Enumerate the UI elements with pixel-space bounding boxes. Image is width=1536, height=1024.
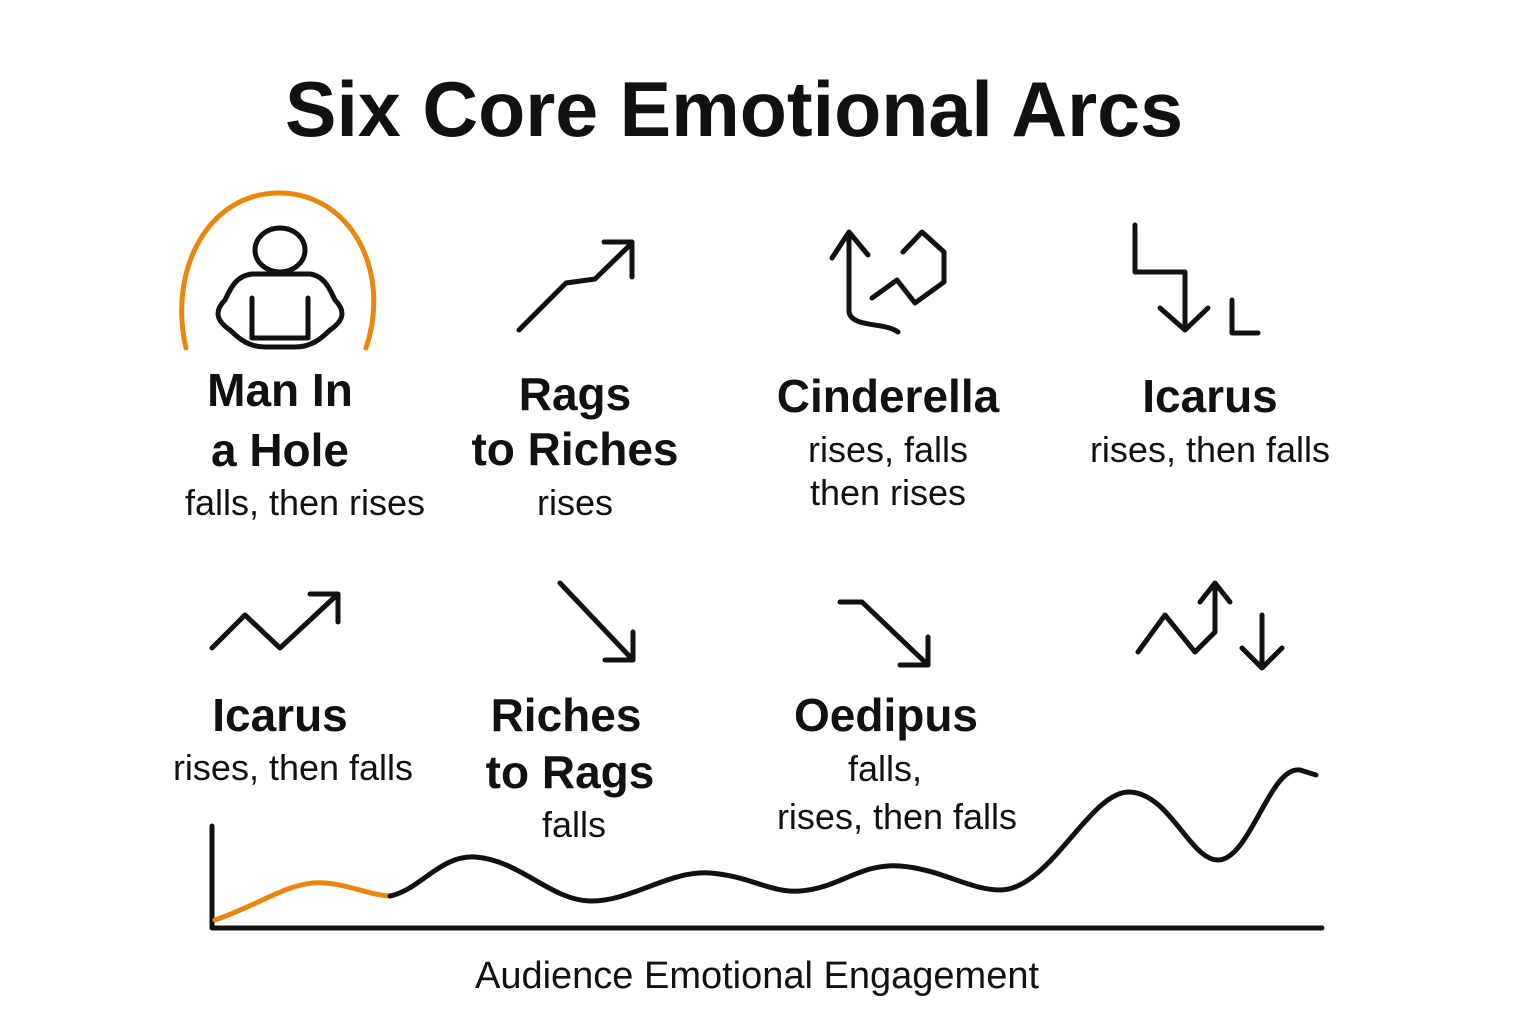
title: Six Core Emotional Arcs (285, 65, 1183, 153)
icon: rags to riches (519, 242, 632, 330)
icon: cinderella (832, 232, 944, 332)
label: riches to rags: falls (542, 804, 606, 845)
label: icarus 2: rises, then falls (173, 747, 413, 788)
label: icarus: rises, then falls (1090, 429, 1330, 470)
label: icarus: Icarus (1142, 370, 1278, 422)
label: icarus 2: Icarus (212, 689, 348, 741)
icon: oedipus arrows (1138, 583, 1282, 668)
icon: riches to rags (560, 583, 633, 660)
label: cinderella: then rises (810, 472, 966, 513)
label: oedipus (777, 689, 1017, 837)
label: riches to rags (486, 689, 654, 845)
chart: engagement curve (212, 770, 1322, 928)
label: oedipus: falls, (848, 748, 922, 789)
icon: icarus (1135, 225, 1258, 333)
label: cinderella: Cinderella (777, 370, 1000, 422)
label: man in a hole (185, 364, 425, 523)
icon: oedipus (840, 602, 928, 665)
label: riches to rags: to Rags (486, 746, 654, 798)
icon: man in a hole (182, 193, 374, 348)
label: rags to riches: Rags (519, 368, 631, 420)
label: man in a hole: Man In (207, 364, 353, 416)
label: cinderella (777, 370, 1000, 513)
label: man in a hole: a Hole (211, 424, 349, 476)
label: rags to riches (471, 368, 679, 523)
label: man in a hole: falls, then rises (185, 482, 425, 523)
label: cinderella: rises, falls (808, 429, 968, 470)
label: oedipus: Oedipus (794, 689, 978, 741)
axis label: Audience Emotional Engagement (475, 955, 1039, 997)
label: rags to riches: rises (537, 482, 613, 523)
label: icarus (1090, 370, 1330, 470)
label: icarus 2 (173, 689, 413, 788)
label: riches to rags: Riches (491, 689, 641, 741)
icon: icarus 2 (212, 594, 338, 648)
label: rags to riches: to Riches (471, 423, 679, 475)
label: oedipus: rises, then falls (777, 796, 1017, 837)
